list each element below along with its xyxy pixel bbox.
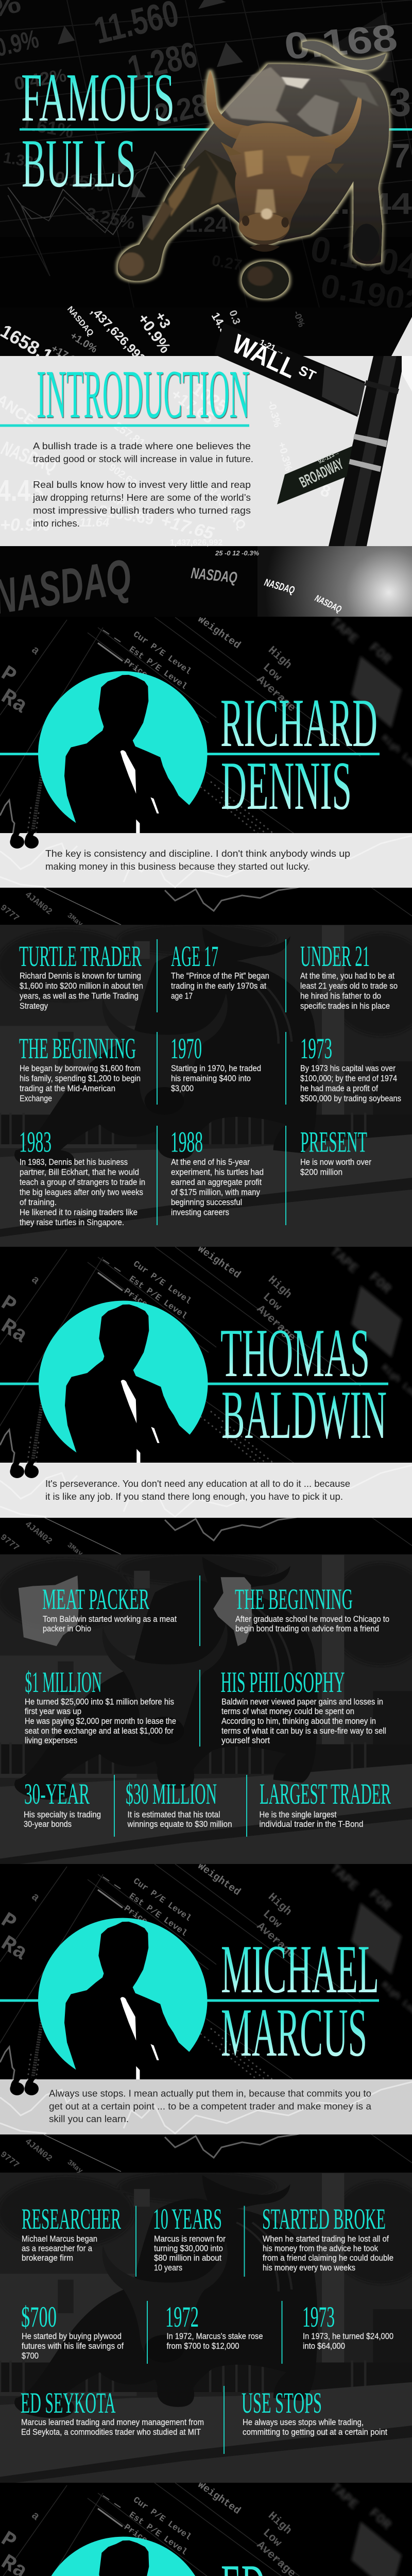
band chart ghost — [0, 2082, 412, 2133]
quote text: it is like any job. If you stand there long enough, you have to pick it up. — [45, 1492, 343, 1502]
quote band — [0, 2079, 412, 2134]
hero ticker background: 7 — [391, 137, 410, 175]
chart background — [1, 2483, 402, 2576]
fact: 1973: $100,000; by the end of 1974 — [300, 1074, 397, 1083]
fact: the beginning: begin bond trading on advice from a friend — [235, 1624, 379, 1633]
quote text: The key is consistency and discipline. I don't think anybody winds up — [45, 849, 350, 859]
fact: age 17: age 17 — [171, 991, 193, 1001]
fact: largest trader: individual trader in the T-Bond — [260, 1820, 364, 1829]
fact: 1970: 1970 — [170, 1032, 202, 1065]
fact: the beginning: trading at the Mid-American — [20, 1084, 115, 1093]
chart background — [0, 1247, 412, 1554]
fact: use stops: He always uses stops while trading, — [243, 2418, 364, 2427]
fact: 1970: his remaining $400 into — [171, 1074, 251, 1083]
chart background — [0, 1864, 412, 2173]
fact: started broke: from a friend claiming he could double — [263, 2253, 393, 2263]
fact: 1972 — [165, 2301, 263, 2351]
fact: $30 million — [126, 1778, 232, 1829]
fact: 1983: He likened it to raising traders like — [20, 1208, 138, 1217]
fact: 1983: of training. — [20, 1198, 57, 1207]
quote text — [45, 849, 350, 872]
fact: $1 million: first year was up — [25, 1707, 81, 1716]
fact: turtle trader: years, as well as the Turtle Trading — [20, 991, 139, 1001]
fact: started broke: his money every two weeks — [263, 2263, 355, 2273]
bull background — [0, 925, 412, 1247]
ghost ticker text: +17.65 — [168, 386, 217, 427]
fact: 1988: of $175 million, with many — [171, 1188, 261, 1197]
fact: 30-year — [24, 1778, 101, 1829]
title: famous: FAMOUS — [21, 59, 175, 135]
panel: michael marcus header — [0, 1860, 412, 2176]
fact: ed seykota — [21, 2387, 204, 2437]
fact: started broke: When he started trading he lost all of — [263, 2234, 389, 2244]
ghost ticker text: NASDAQ — [203, 483, 249, 533]
fact: 1970: Starting in 1970, he traded — [171, 1064, 261, 1073]
fact: the beginning: THE BEGINNING — [19, 1032, 136, 1065]
wall street background: NASDAQ — [263, 577, 296, 596]
silhouette — [39, 1301, 208, 1466]
title: bulls: BULLS — [22, 125, 136, 201]
fact: 1973: 1973 — [300, 1032, 332, 1065]
fact: turtle trader — [19, 940, 143, 1011]
fact: under 21: least 21 years old to trade so — [300, 981, 398, 991]
fact: meat packer: MEAT PACKER — [42, 1583, 149, 1616]
broadway sign — [277, 446, 352, 504]
fact: present: He is now worth over — [300, 1158, 371, 1167]
fact: his philosophy: terms of what money could be spent on — [221, 1707, 354, 1716]
fact: 1988: earned an aggregate profit — [171, 1178, 262, 1187]
hero ticker background: 3.25% — [84, 204, 137, 233]
wall street background: +1.0% — [68, 330, 99, 355]
fact: $700: $700 — [22, 2351, 39, 2361]
fact: age 17: The “Prince of the Pit” began — [171, 972, 269, 981]
ghost ticker text: 1,437,626,992 — [170, 538, 222, 547]
silhouette — [38, 1918, 208, 2083]
fact: turtle trader: $1,600 into $200 million in about ten — [20, 981, 143, 991]
fact: 1988: At the end of his 5-year — [171, 1158, 250, 1167]
panel: hero — [0, 0, 412, 321]
fact: his philosophy: yourself short — [221, 1736, 270, 1745]
intro text: Real bulls know how to invest very little and reap — [33, 480, 251, 490]
fact: the beginning: Exchange — [20, 1094, 52, 1104]
fact: largest trader — [260, 1778, 391, 1829]
fact: 1988: beginning successful — [171, 1198, 242, 1207]
hero ticker background: 1.322 — [2, 149, 43, 173]
fact: 1983: teach a group of strangers to trade in — [20, 1178, 145, 1187]
fact: the beginning — [19, 1032, 141, 1104]
ghost ticker text: -0.3% — [265, 400, 283, 429]
intro band — [0, 356, 412, 546]
bull statue — [118, 41, 389, 299]
fact: use stops: committing to getting out at a certain point — [243, 2428, 387, 2437]
wall street background: NASDAQ — [190, 565, 238, 586]
ghost ticker text: +11.64 — [72, 516, 109, 530]
panel: thomas baldwin header — [0, 1243, 412, 1558]
wall street background: +17.11 — [49, 343, 82, 368]
wall street background: -0% — [291, 310, 307, 328]
fact: use stops — [242, 2387, 387, 2437]
dividers — [157, 939, 286, 1225]
fact: 1973: into $64,000 — [303, 2342, 345, 2351]
ghost ticker text: 2105.69 — [97, 502, 155, 529]
fact: turtle trader: Richard Dennis is known for turning — [20, 972, 141, 981]
fact: ed seykota: ED SEYKOTA — [21, 2387, 116, 2419]
panel: ed seykota header — [0, 2479, 412, 2576]
panel: richard dennis header — [0, 614, 412, 929]
hero ticker background — [0, 0, 412, 321]
wall st sign: 1-21 → — [258, 338, 286, 358]
fact: 1973 — [302, 2301, 393, 2351]
bull background — [0, 2173, 412, 2483]
fact: 1988: experiment, his turtles had — [171, 1168, 264, 1177]
panel: richard dennis facts — [0, 916, 412, 1270]
fact: 10 years — [153, 2203, 226, 2273]
wall street background: 0.3 — [227, 309, 242, 326]
hero ticker background: 3 — [389, 79, 411, 125]
wall st sign: ST — [296, 362, 318, 383]
intro text: A bullish trade is a trade where one believes the — [33, 441, 251, 451]
fact: largest trader: He is the single largest — [260, 1810, 337, 1820]
intro rule — [0, 425, 249, 427]
fact: 1973: By 1973 his capital was over — [300, 1064, 396, 1073]
fact: 1972: In 1972, Marcus’s stake rose — [167, 2332, 263, 2341]
fact: age 17 — [171, 940, 269, 1001]
fact: researcher: Michael Marcus began — [22, 2234, 97, 2244]
intro text: jaw dropping returns! Here are some of the world’s — [32, 493, 251, 503]
fact: $700: He started by buying plywood — [22, 2332, 122, 2341]
fact: ed seykota: Ed Seykota, a commodities trader who studied at MIT — [21, 2428, 201, 2437]
fact: $1 million: He turned $25,000 into $1 million before his — [25, 1697, 174, 1706]
fact: 1983: partner, Bill Eckhart, that he would — [20, 1168, 139, 1177]
wall st sign: WALL — [228, 329, 301, 384]
fact: 10 years: $80 million in about — [154, 2253, 221, 2263]
quote text — [49, 2089, 372, 2124]
fact: turtle trader: TURTLE TRADER — [19, 940, 142, 973]
broadway sign: BROADWAY — [297, 455, 346, 491]
fact: under 21: At the time, you had to be at — [300, 972, 394, 981]
fact: the beginning: his family, spending $1,200 to begin — [20, 1074, 141, 1083]
wall street background: ,437,626,992 — [88, 304, 148, 366]
fact: 30-year: His specialty is trading — [24, 1810, 101, 1820]
band chart ghost — [0, 836, 412, 887]
intro text — [32, 441, 253, 529]
fact: 1988: 1988 — [170, 1126, 203, 1158]
chart background — [0, 617, 412, 925]
fact: 1983 — [19, 1126, 145, 1227]
name rule — [0, 1999, 379, 2002]
fact: 1973: he had made a profit of — [300, 1084, 378, 1093]
fact: present: $200 million — [300, 1168, 342, 1177]
fact: 1972: from $700 to $12,000 — [167, 2342, 239, 2351]
fact: his philosophy: According to him, thinking about the money in — [221, 1717, 376, 1726]
fact: meat packer: Tom Baldwin started working as a meat — [43, 1615, 177, 1624]
fact: 1970 — [170, 1032, 261, 1093]
intro text: into riches. — [33, 518, 80, 529]
panel: michael marcus facts — [0, 2163, 412, 2518]
fact: $700: futures with his life savings of — [22, 2342, 124, 2351]
fact: 10 years: 10 YEARS — [153, 2203, 222, 2235]
fact: his philosophy: Baldwin never viewed paper gains and losses in — [221, 1697, 383, 1706]
quote text: get out at a certain point ... to be a competent trader and make money is a — [49, 2101, 372, 2111]
intro text: most impressive bullish traders who turned rags — [33, 505, 251, 516]
fact: use stops: USE STOPS — [242, 2387, 322, 2419]
ghost ticker text: S&P 500 — [101, 486, 146, 522]
fact: 1983: the big leagues after only two weeks — [20, 1188, 143, 1197]
fact: 10 years: turning $30,000 into — [154, 2244, 223, 2253]
ghost ticker text: +0.3% — [276, 441, 294, 472]
fact: $30 million: $30 MILLION — [126, 1778, 217, 1810]
hero ticker background: 2.28 — [151, 87, 211, 133]
quote band — [0, 1463, 412, 1518]
bull background — [0, 1554, 412, 1864]
wall street background: +3 — [152, 309, 174, 331]
fact: 30-year: 30-YEAR — [24, 1778, 90, 1810]
fact: under 21: he hired his father to do — [300, 991, 381, 1001]
fact: age 17: AGE 17 — [171, 940, 218, 973]
quote mark — [10, 1458, 39, 1478]
quote text — [45, 1479, 350, 1502]
panel: thomas baldwin facts — [0, 1545, 412, 1900]
quote mark — [10, 2075, 39, 2095]
fact: age 17: trading in the early 1970s at — [171, 981, 266, 991]
fact: $1 million: $1 MILLION — [25, 1666, 102, 1699]
fact: researcher: as a researcher for a — [22, 2244, 93, 2253]
fact: present — [300, 1126, 371, 1177]
wall street background: 14.50 — [209, 310, 234, 341]
fact: $700 — [21, 2301, 124, 2361]
fact: the beginning: He began by borrowing $1,600 from — [20, 1064, 141, 1073]
fact: $1 million: seat on the exchange and at least $1,000 for — [25, 1726, 174, 1736]
name rule — [0, 1383, 388, 1385]
wall street background — [0, 304, 412, 625]
fact: 1972: 1972 — [165, 2301, 199, 2333]
fact: $700: $700 — [21, 2301, 57, 2333]
wall street background: NASDAQ — [65, 305, 95, 338]
name rule — [0, 753, 380, 755]
ghost ticker text: 1025 — [188, 379, 231, 417]
fact: 1983: they raise turtles in Singapore. — [20, 1218, 124, 1227]
hero ticker background: 0.42% — [12, 64, 68, 94]
ghost ticker text: 902.63 — [107, 462, 139, 489]
fact: ed seykota: Marcus learned trading and money management from — [21, 2418, 204, 2427]
intro text: traded good or stock will increase in value in future. — [33, 454, 253, 464]
dividers — [114, 1575, 247, 1837]
fact: 1983: 1983 — [19, 1126, 52, 1158]
fact: 1973: 1973 — [302, 2301, 335, 2333]
sign post — [329, 356, 412, 546]
fact: researcher — [22, 2203, 121, 2263]
panel: introduction — [0, 304, 412, 625]
dividers — [135, 2206, 282, 2454]
broadway sign: 92-113→ — [317, 449, 340, 465]
fact: turtle trader: Strategy — [20, 1002, 48, 1011]
fact: 1973: $500,000 by trading soybeans — [300, 1094, 401, 1104]
wall street background: +0.9% — [134, 311, 174, 357]
wall street background: 25 -0 12 -0.3% — [215, 549, 259, 557]
quote text: Always use stops. I mean actually put them in, because that commits you to — [49, 2089, 371, 2099]
ghost ticker text: 8 — [318, 481, 333, 501]
fact: started broke — [262, 2203, 393, 2273]
map: ohio — [19, 1575, 79, 1646]
fact: the beginning — [235, 1583, 389, 1633]
silhouette — [39, 2537, 208, 2576]
hero ticker background: 0.168 — [282, 17, 400, 67]
fact: meat packer — [42, 1583, 177, 1633]
ghost ticker text: 257.81 — [112, 419, 148, 450]
fact: $30 million: It is estimated that his total — [128, 1810, 220, 1820]
quote text: making money in this business because they started out lucky. — [45, 861, 310, 872]
fact: $1 million: He was paying $2,000 per month to lease the — [25, 1717, 176, 1726]
ghost ticker text: +17.65 — [159, 511, 216, 544]
fact: 1988: investing careers — [171, 1208, 229, 1217]
quote mark — [10, 828, 39, 849]
fact: started broke: his money from the advice he took — [263, 2244, 379, 2253]
hero ticker background: 1.24 — [185, 212, 228, 236]
fact: researcher: RESEARCHER — [22, 2203, 121, 2235]
fact: 1988 — [170, 1126, 264, 1217]
fact: 30-year: 30-year bonds — [24, 1820, 72, 1829]
fact: $30 million: winnings equate to $30 million — [127, 1820, 232, 1829]
fact: under 21: specific trades in his place — [300, 1002, 390, 1011]
fact: his philosophy: terms of what it can buy is a sure-fire way to sell — [221, 1726, 386, 1736]
fact: 10 years: Marcus is renown for — [154, 2234, 226, 2244]
silhouette — [38, 671, 208, 837]
fact: 1983: In 1983, Dennis bet his business — [20, 1158, 128, 1167]
hero rule — [20, 128, 412, 131]
fact: 1973: In 1973, he turned $24,000 — [303, 2332, 393, 2341]
fact: his philosophy — [220, 1666, 386, 1745]
fact: researcher: brokerage firm — [22, 2253, 73, 2263]
hero ticker background: 1.286 — [124, 34, 201, 89]
quote text: skill you can learn. — [49, 2114, 129, 2124]
fact: meat packer: packer in Ohio — [43, 1624, 91, 1633]
fact: $1 million — [25, 1666, 176, 1745]
fact: $1 million: living expenses — [25, 1736, 77, 1745]
map: illinois — [213, 1577, 252, 1646]
fact: 1973 — [300, 1032, 401, 1104]
ghost ticker text: NASDAQ — [0, 437, 59, 477]
hero ticker background: 2.144 — [319, 187, 412, 221]
wall street background: NASDAQ — [313, 593, 343, 615]
ghost ticker text: +0.9% — [0, 515, 50, 535]
fact: 10 years: 10 years — [154, 2263, 182, 2273]
hero ticker background: 1.61% — [20, 112, 75, 142]
fact: under 21 — [300, 940, 398, 1011]
wall st sign — [214, 323, 365, 417]
quote text: It's perseverance. You don't need any education at all to do it ... because — [45, 1479, 350, 1489]
hero ticker background: 0.15% — [54, 167, 106, 196]
hero ticker background: 0.27 — [211, 252, 243, 274]
ghost ticker text — [0, 379, 333, 547]
band chart ghost — [0, 1465, 412, 1517]
fact: the beginning: After graduate school he moved to Chicago to — [235, 1615, 389, 1624]
fact: 1970: $3,000 — [171, 1084, 194, 1093]
quote band — [0, 833, 412, 888]
